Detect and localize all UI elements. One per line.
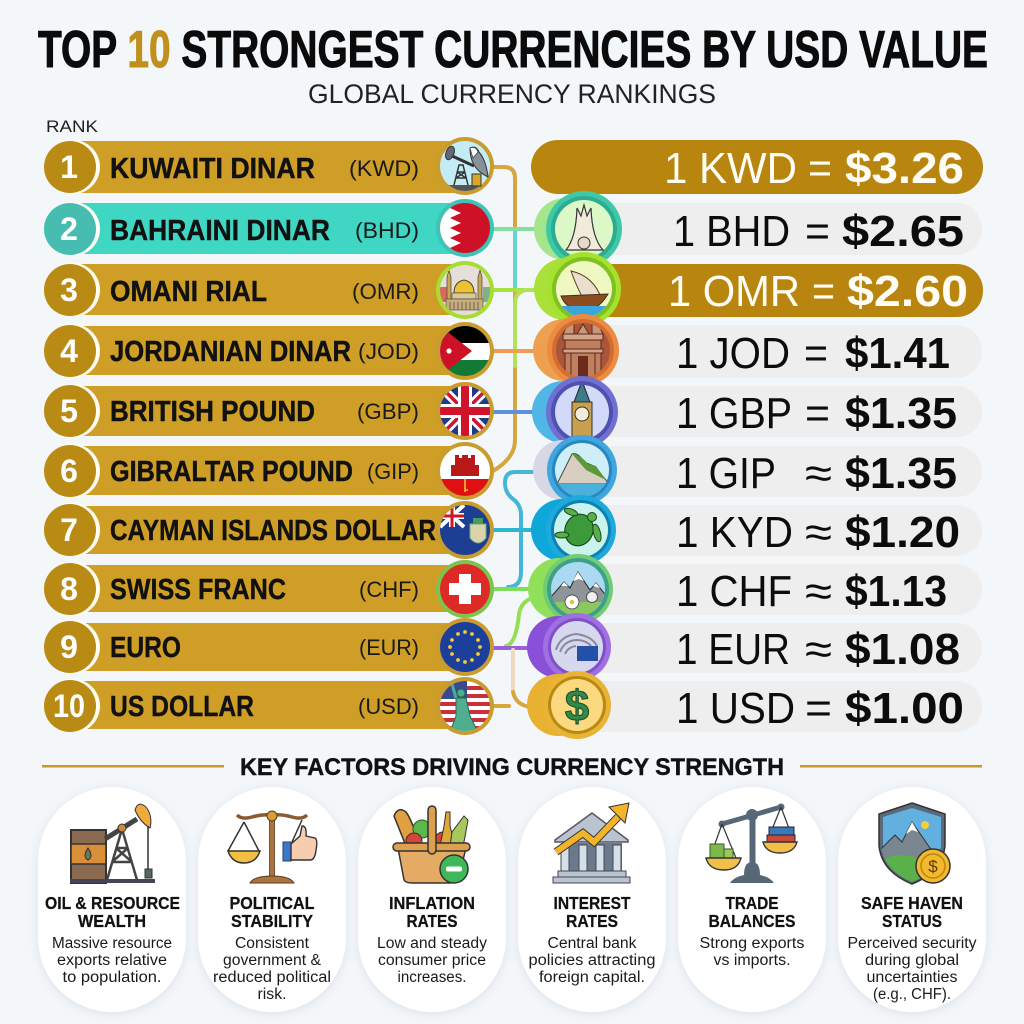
card text: political: STABILITY — [231, 911, 313, 931]
row 3 Omani Rial — [44, 261, 494, 319]
icon: flag of Cayman Islands — [436, 501, 494, 559]
card text: oil — [45, 893, 180, 986]
card text: safe haven: (e.g., CHF). — [873, 986, 951, 1003]
right landmark icons — [527, 191, 622, 739]
value bar: KYD: 1 KYD — [676, 508, 793, 557]
value bar: KWD — [531, 140, 983, 194]
card text: safe haven: during global — [865, 952, 959, 969]
icon: shield with mountains and coin — [879, 803, 950, 885]
row 8 Swiss Franc: 8 — [60, 571, 78, 607]
card text: oil: OIL & RESOURCE — [45, 893, 180, 913]
value bar: EUR: 1 EUR — [676, 625, 790, 674]
row 1 Kuwaiti Dinar — [44, 137, 494, 195]
card: safe haven status — [838, 787, 986, 1012]
value bar: EUR: $1.08 — [845, 625, 960, 674]
card text: political: POLITICAL — [230, 893, 315, 913]
row 4 Jordanian Dinar: (JOD) — [358, 339, 419, 364]
value bar: KYD: $1.20 — [845, 508, 960, 557]
value bar: GIP: 1 GIP — [676, 449, 776, 498]
icon: flag of Switzerland — [436, 560, 494, 618]
value bar: OMR: = — [812, 267, 835, 316]
value bar: USD: $1.00 — [845, 684, 964, 733]
card: oil and resource wealth — [38, 787, 186, 1012]
right value bars — [531, 140, 983, 733]
icon: US flag and statue of liberty — [436, 677, 494, 735]
card text: interest: Central bank — [548, 935, 637, 952]
rows: left rankings — [44, 137, 494, 735]
row 3 Omani Rial: (OMR) — [352, 279, 419, 304]
card text: trade — [700, 893, 805, 969]
row 6 Gibraltar Pound: GIBRALTAR POUND — [110, 456, 353, 488]
card text: oil: to population. — [62, 969, 162, 986]
row 2 Bahraini Dinar: 2 — [60, 211, 78, 247]
value bar: OMR: 1 OMR — [668, 267, 800, 316]
value bar: JOD — [560, 325, 982, 378]
row 4 Jordanian Dinar — [44, 322, 494, 380]
icon: grocery basket with minus badge — [393, 806, 470, 883]
icon: scales with thumbs up — [228, 811, 317, 883]
row 3 Omani Rial: 3 — [60, 272, 78, 308]
value bar: EUR: ≈ — [805, 625, 832, 674]
value bar: BHD: 1 BHD — [673, 207, 790, 256]
icon: shield with mountains and coin: $ — [928, 857, 938, 876]
row 1 Kuwaiti Dinar: KUWAITI DINAR — [110, 153, 315, 185]
value bar: BHD: $2.65 — [842, 207, 964, 256]
row 1 Kuwaiti Dinar: 1 — [60, 149, 78, 185]
value bar: BHD — [560, 203, 982, 256]
card text: trade: TRADE — [726, 893, 778, 913]
card text: trade: vs imports. — [714, 952, 790, 969]
icon: Big Ben — [532, 376, 618, 448]
row 5 British Pound — [44, 382, 494, 440]
card: political stability — [198, 787, 346, 1012]
icon: oil barrel and pumpjack — [70, 804, 155, 883]
connector lines — [493, 167, 540, 707]
card text: inflation: Low and steady — [377, 935, 487, 952]
row 7 Cayman Islands Dollar — [44, 501, 494, 559]
icon: flag of Jordan — [436, 322, 494, 380]
card text: safe haven: uncertainties — [866, 969, 958, 986]
card text: interest: INTEREST — [554, 893, 631, 913]
card text: safe haven — [848, 893, 977, 1003]
card text: trade: Strong exports — [700, 935, 805, 952]
card text: political — [213, 893, 331, 1003]
card text: inflation — [377, 893, 487, 986]
icon: dollar coin — [527, 671, 611, 739]
value bar: GBP: = — [805, 389, 830, 438]
icon: flag of UK — [436, 382, 494, 440]
value bar: OMR: $2.60 — [847, 267, 968, 316]
row 5 British Pound: (GBP) — [357, 399, 419, 424]
row 6 Gibraltar Pound: (GIP) — [367, 459, 419, 484]
value bar: KYD: ≈ — [805, 508, 832, 557]
value bar: CHF: 1 CHF — [676, 567, 792, 616]
row 10 US Dollar: US DOLLAR — [110, 691, 254, 723]
value bar: CHF — [560, 564, 982, 616]
icon: Oman mosque badge — [436, 261, 494, 319]
value bar: EUR — [560, 623, 982, 674]
row 7 Cayman Islands Dollar: CAYMAN ISLANDS DOLLAR — [110, 515, 436, 547]
value bar: KWD: $3.26 — [845, 144, 964, 193]
row 4 Jordanian Dinar: 4 — [60, 333, 78, 369]
row 6 Gibraltar Pound: 6 — [60, 453, 78, 489]
icon: Kuwait oil and falcon badge — [436, 137, 494, 195]
row 1 Kuwaiti Dinar: (KWD) — [349, 156, 419, 181]
section heading: key factors: KEY FACTORS DRIVING CURRENCY STRENGTH — [240, 754, 784, 781]
value bar: GIP: $1.35 — [845, 449, 957, 498]
value bar: GIP — [560, 446, 982, 498]
value bar: KYD — [560, 505, 982, 557]
row 9 Euro — [44, 618, 494, 676]
row 10 US Dollar — [44, 677, 494, 735]
value bar: USD: = — [805, 684, 832, 733]
row 5 British Pound: 5 — [60, 393, 78, 429]
row 9 Euro: EURO — [110, 632, 181, 664]
row 8 Swiss Franc — [44, 560, 494, 618]
value bar: JOD: = — [804, 329, 828, 378]
subtitle: GLOBAL CURRENCY RANKINGS — [308, 79, 716, 109]
card text: interest: policies attracting — [528, 952, 656, 969]
card text: safe haven: STATUS — [882, 911, 942, 931]
row 6 Gibraltar Pound — [44, 442, 494, 500]
row 5 British Pound: BRITISH POUND — [110, 396, 315, 428]
icon: dollar coin: $ — [565, 682, 589, 731]
card text: oil: WEALTH — [78, 911, 146, 931]
card text: safe haven: SAFE HAVEN — [861, 893, 963, 913]
value bar: CHF: $1.13 — [845, 567, 947, 616]
value bar: GIP: ≈ — [805, 449, 832, 498]
value bar: GBP — [560, 386, 982, 438]
card text: political: Consistent — [235, 935, 310, 952]
row 8 Swiss Franc: SWISS FRANC — [110, 574, 286, 606]
value bar: GBP: 1 GBP — [676, 389, 792, 438]
icon: sea turtle — [531, 495, 616, 565]
row 7 Cayman Islands Dollar: 7 — [60, 512, 78, 548]
card text: political: government & — [223, 952, 322, 969]
value bar: JOD: 1 JOD — [676, 329, 790, 378]
row 4 Jordanian Dinar: JORDANIAN DINAR — [110, 336, 351, 368]
row 10 US Dollar: (USD) — [358, 694, 419, 719]
row 2 Bahraini Dinar — [44, 199, 494, 257]
value bar: BHD: = — [805, 207, 830, 256]
card text: inflation: increases. — [398, 969, 466, 986]
value bar: KWD: = — [808, 144, 832, 193]
card text: oil: Massive resource — [52, 935, 172, 952]
row 10 US Dollar: 10 — [53, 688, 85, 724]
row 9 Euro: (EUR) — [359, 635, 419, 660]
row 9 Euro: 9 — [60, 629, 78, 665]
row 8 Swiss Franc: (CHF) — [359, 577, 419, 602]
row 3 Omani Rial: OMANI RIAL — [110, 276, 267, 308]
card: inflation rates — [358, 787, 506, 1012]
icon: Petra treasury — [533, 314, 619, 386]
value bar: USD — [560, 681, 982, 733]
icon: flag of EU — [436, 618, 494, 676]
value bar: GBP: $1.35 — [845, 389, 957, 438]
card text: inflation: INFLATION — [389, 893, 475, 913]
card text: safe haven: Perceived security — [848, 935, 977, 952]
value bar: OMR — [560, 264, 983, 317]
value bar: JOD: $1.41 — [845, 329, 950, 378]
card text: inflation: RATES — [406, 911, 458, 931]
card text: inflation: consumer price — [378, 952, 486, 969]
icon: bank with rising arrow — [553, 803, 630, 883]
card text: oil: exports relative — [57, 952, 167, 969]
icon: Swiss alps and edelweiss — [528, 554, 613, 624]
icon: flag of Bahrain — [436, 199, 494, 257]
value bar: USD: 1 USD — [676, 684, 795, 733]
card text: interest: RATES — [566, 911, 618, 931]
icon: flag of Gibraltar — [436, 442, 494, 500]
row 2 Bahraini Dinar: (BHD) — [355, 218, 419, 243]
card text: trade: BALANCES — [708, 911, 796, 931]
icon: European parliament — [527, 613, 611, 681]
card text: interest — [528, 893, 656, 986]
icon: Rock of Gibraltar — [533, 435, 617, 505]
card text: interest: foreign capital. — [539, 969, 645, 986]
rank column label: RANK — [46, 118, 98, 136]
row 2 Bahraini Dinar: BAHRAINI DINAR — [110, 215, 330, 247]
card: interest rates — [518, 787, 666, 1012]
card text: political: reduced political — [213, 969, 331, 986]
icon: Omani dhow — [534, 252, 621, 326]
icon: Bahrain monument — [534, 191, 622, 267]
card text: political: risk. — [258, 986, 286, 1003]
icon: tilted balance with goods — [706, 804, 797, 883]
value bar: KWD: 1 KWD — [664, 144, 797, 193]
value bar: CHF: ≈ — [805, 567, 832, 616]
card: trade balances — [678, 787, 826, 1012]
